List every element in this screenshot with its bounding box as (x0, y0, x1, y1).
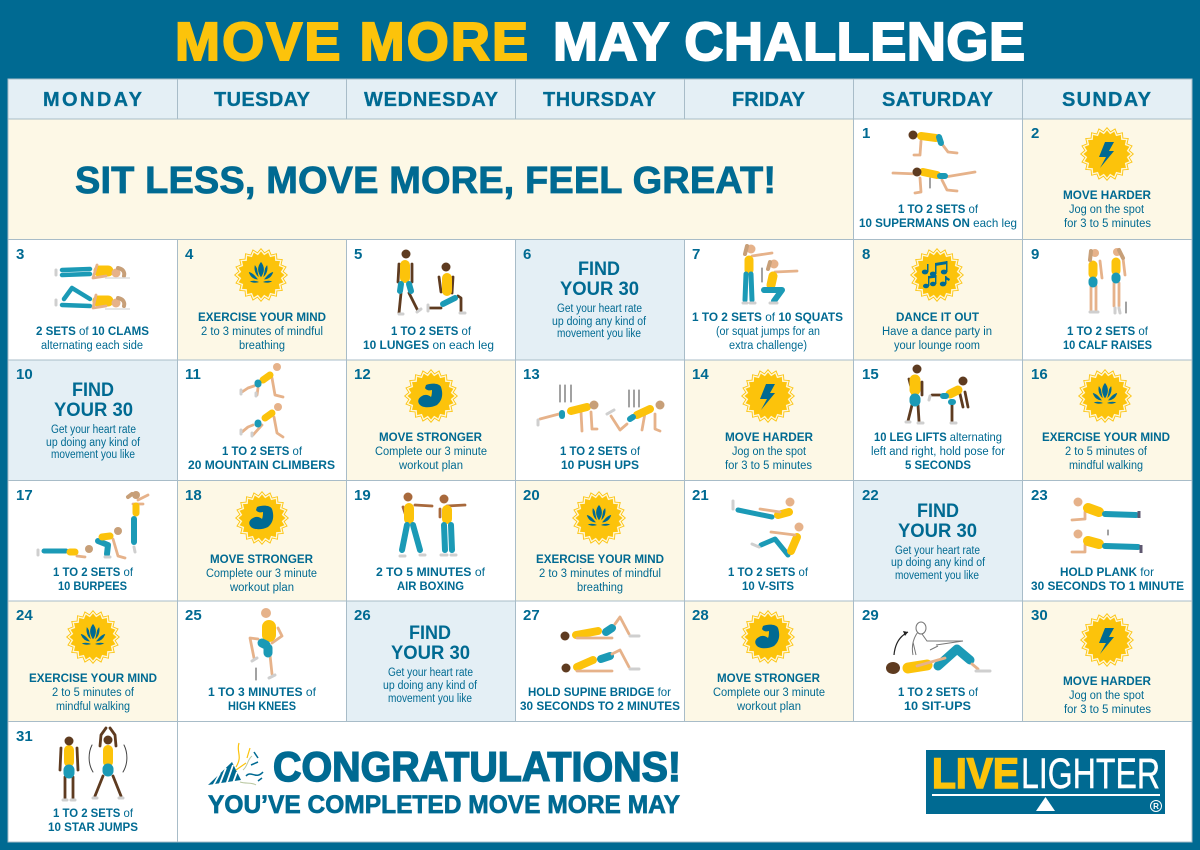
figure: star jumps (60, 728, 127, 800)
caption: movement you like (388, 693, 472, 705)
day number: 15 (862, 366, 879, 383)
caption: 10 SUPERMANS ON each leg (859, 216, 1017, 230)
icon: lotus badge (1078, 369, 1132, 423)
caption: 1 TO 2 SETS of (898, 202, 979, 216)
day number: 10 (16, 366, 33, 383)
caption: 2 to 3 minutes of mindful (539, 568, 661, 580)
figure: squats (743, 244, 797, 303)
caption (36, 324, 149, 352)
caption: up doing any kind of (891, 557, 986, 569)
caption: 1 TO 2 SETS of (1067, 324, 1149, 338)
caption: breathing (577, 582, 623, 594)
caption: EXERCISE YOUR MIND (1042, 430, 1170, 444)
caption: HOLD SUPINE BRIDGE for (528, 685, 671, 699)
figure: high knees (250, 608, 282, 680)
day number: 20 (523, 487, 540, 504)
figure: burpees (38, 491, 148, 558)
caption: YOUR 30 (560, 279, 639, 300)
caption (48, 806, 138, 834)
caption: MOVE STRONGER (210, 552, 313, 566)
caption: FIND (578, 259, 620, 280)
logo: LiveLighter (926, 750, 1165, 814)
day number: 22 (862, 487, 879, 504)
day number: 3 (16, 246, 24, 263)
caption: Complete our 3 minute (713, 687, 825, 699)
caption (188, 444, 335, 472)
caption: 1 TO 2 SETS of (391, 324, 472, 338)
figure: lunges (398, 250, 465, 314)
caption (376, 565, 486, 593)
caption: YOUR 30 (898, 521, 977, 542)
panel: day 9 (1022, 240, 1192, 360)
icon: lightning badge (1080, 613, 1134, 667)
panel: day 22 (854, 480, 1022, 601)
caption (692, 310, 843, 352)
day number: 26 (354, 607, 371, 624)
caption: FIND (409, 623, 451, 644)
caption: 2 to 5 minutes of (1065, 446, 1148, 458)
caption (552, 259, 647, 340)
panel: day 17 (8, 480, 178, 601)
caption: 5 SECONDS (905, 458, 971, 472)
day number: 6 (523, 246, 531, 263)
heading: CONGRATULATIONS! (273, 743, 681, 790)
caption (713, 671, 825, 713)
caption (871, 430, 1005, 472)
caption: 1 TO 2 SETS of (898, 685, 979, 699)
caption: breathing (239, 340, 285, 352)
caption: 1 TO 2 SETS of 10 SQUATS (692, 310, 843, 324)
figure: clams (56, 265, 130, 309)
panel: day 13 (516, 360, 684, 480)
caption: mindful walking (1069, 460, 1143, 472)
weekday header row: SUNDAY (1062, 89, 1152, 111)
title (175, 12, 1025, 72)
caption: 10 BURPEES (58, 579, 127, 593)
panel: day 25 (178, 601, 346, 722)
panel: day 15 (854, 360, 1022, 480)
caption: Jog on the spot (732, 446, 807, 458)
panel: day 26 (346, 601, 516, 722)
caption: 30 SECONDS TO 1 MINUTE (1031, 579, 1184, 593)
weekday header row: TUESDAY (214, 89, 311, 111)
panel: day 27 (516, 601, 684, 722)
figure: supermans (893, 130, 975, 193)
day number: 11 (185, 366, 201, 383)
caption: workout plan (229, 582, 294, 594)
panel: day 31 (8, 722, 178, 842)
caption (1063, 674, 1151, 716)
caption: AIR BOXING (397, 579, 464, 593)
title: MOVE MORE (175, 12, 528, 72)
panel: day 4 (178, 240, 346, 360)
day number: 16 (1031, 366, 1048, 383)
panel: day 23 (1022, 480, 1192, 601)
panel: day 7 (684, 240, 854, 360)
caption: for 3 to 5 minutes (1064, 218, 1151, 230)
day number: 12 (354, 366, 371, 383)
weekday header row: SATURDAY (882, 89, 994, 111)
logo: LiveLighter: R (1153, 802, 1159, 811)
panel: day 16 (1022, 360, 1192, 480)
caption: MOVE HARDER (1063, 188, 1151, 202)
icon: party popper (208, 743, 263, 786)
panel: day 1 (854, 119, 1022, 240)
caption: 10 SIT-UPS (904, 699, 971, 713)
caption (536, 552, 664, 594)
caption: 1 TO 2 SETS of (222, 444, 303, 458)
caption (1063, 188, 1151, 230)
caption: EXERCISE YOUR MIND (536, 552, 664, 566)
icon: music notes badge (910, 248, 964, 302)
caption: HIGH KNEES (228, 699, 296, 713)
logo: LiveLighter: LIVE (932, 750, 1019, 798)
caption: 1 TO 3 MINUTES of (208, 685, 317, 699)
caption (208, 685, 317, 713)
caption: 1 TO 2 SETS of (53, 806, 134, 820)
caption (29, 671, 157, 713)
icon: lotus badge (66, 610, 120, 664)
caption: 10 LEG LIFTS alternating (874, 430, 1002, 444)
day number: 8 (862, 246, 870, 263)
caption: HOLD PLANK for (1060, 565, 1154, 579)
panel: day 11 (178, 360, 346, 480)
day number: 14 (692, 366, 709, 383)
caption: EXERCISE YOUR MIND (29, 671, 157, 685)
caption (1063, 324, 1152, 352)
panel: day 12 (346, 360, 516, 480)
caption (728, 565, 809, 593)
day number: 4 (185, 246, 194, 263)
caption: workout plan (398, 460, 463, 472)
day number: 7 (692, 246, 700, 263)
caption (1042, 430, 1170, 472)
caption: Jog on the spot (1069, 204, 1145, 216)
caption (206, 552, 317, 594)
caption: Get your heart rate (895, 545, 980, 557)
icon: flexed arm badge (404, 369, 458, 423)
caption: EXERCISE YOUR MIND (198, 310, 326, 324)
caption: 10 V-SITS (742, 579, 794, 593)
caption: 30 SECONDS TO 2 MINUTES (520, 699, 680, 713)
day number: 18 (185, 487, 202, 504)
day number: 21 (692, 487, 709, 504)
caption: movement you like (895, 570, 979, 582)
panel: day 21 (684, 480, 854, 601)
day number: 1 (862, 125, 870, 142)
day number: 2 (1031, 125, 1039, 142)
day number: 28 (692, 607, 709, 624)
panel: day 24 (8, 601, 178, 722)
caption: Complete our 3 minute (375, 446, 487, 458)
weekday header row: THURSDAY (543, 89, 657, 111)
caption (859, 202, 1017, 230)
figure: supine bridge (560, 617, 639, 672)
panel: day 30 (1022, 601, 1192, 722)
caption: Have a dance party in (882, 326, 992, 338)
caption (560, 444, 641, 472)
icon: flexed arm badge (235, 491, 289, 545)
caption: 2 TO 5 MINUTES of (376, 565, 486, 579)
caption: 1 TO 2 SETS of (728, 565, 809, 579)
caption (1031, 565, 1184, 593)
caption: movement you like (51, 449, 135, 461)
caption: Complete our 3 minute (206, 568, 317, 580)
caption: 10 CALF RAISES (1063, 338, 1152, 352)
caption: DANCE IT OUT (896, 310, 980, 324)
caption: MOVE STRONGER (717, 671, 820, 685)
panel: day 3 (8, 240, 178, 360)
caption: up doing any kind of (46, 437, 141, 449)
panel: day 10 (8, 360, 178, 480)
caption: YOUR 30 (391, 643, 470, 664)
panel: slogan banner: SIT LESS, MOVE MORE, FEEL GREAT! (75, 160, 776, 202)
caption (520, 685, 680, 713)
weekday header row: FRIDAY (732, 89, 806, 111)
weekday header row (8, 79, 1192, 119)
icon: flexed arm badge (741, 610, 795, 664)
figure: leg lifts (906, 364, 968, 423)
caption: 2 SETS of 10 CLAMS (36, 324, 149, 338)
caption: alternating each side (41, 340, 143, 352)
day number: 13 (523, 366, 540, 383)
caption (725, 430, 813, 472)
caption (375, 430, 487, 472)
caption: (or squat jumps for an (716, 326, 820, 338)
panel: day 18 (178, 480, 346, 601)
panel: day 8 (854, 240, 1022, 360)
panel: congratulations (178, 722, 1192, 842)
caption (882, 310, 992, 352)
figure: calf raises (1090, 248, 1126, 313)
caption: up doing any kind of (552, 316, 647, 328)
day number: 30 (1031, 607, 1048, 624)
caption: Get your heart rate (51, 424, 136, 436)
caption: movement you like (557, 328, 641, 340)
panel: day 19 (346, 480, 516, 601)
caption: your lounge room (894, 340, 980, 352)
caption: left and right, hold pose for (871, 446, 1005, 458)
day number: 31 (16, 728, 33, 745)
day number: 29 (862, 607, 879, 624)
icon: lightning badge (741, 369, 795, 423)
day number: 17 (16, 487, 33, 504)
caption: 2 to 5 minutes of (52, 687, 135, 699)
panel: day 20 (516, 480, 684, 601)
caption: Get your heart rate (557, 303, 642, 315)
caption: extra challenge) (729, 340, 807, 352)
caption: Jog on the spot (1069, 690, 1145, 702)
figure: air boxing (400, 492, 465, 556)
caption: 20 MOUNTAIN CLIMBERS (188, 458, 335, 472)
caption: MOVE STRONGER (379, 430, 482, 444)
caption: FIND (72, 380, 114, 401)
panel: day 2 (1022, 119, 1192, 240)
caption: mindful walking (56, 701, 130, 713)
weekday header row: MONDAY (43, 89, 143, 111)
caption: for 3 to 5 minutes (725, 460, 812, 472)
icon: lotus badge (572, 491, 626, 545)
figure: push ups (538, 385, 664, 431)
panel: day 14 (684, 360, 854, 480)
caption (383, 623, 478, 705)
caption (891, 501, 986, 582)
icon: lightning badge (1080, 127, 1134, 181)
panel: day 29 (854, 601, 1022, 722)
figure: v-sits (733, 498, 804, 555)
day number: 5 (354, 246, 362, 263)
day number: 27 (523, 607, 540, 624)
caption (198, 310, 326, 352)
caption: up doing any kind of (383, 680, 478, 692)
caption: for 3 to 5 minutes (1064, 704, 1151, 716)
caption: YOUR 30 (54, 400, 133, 421)
caption: 10 PUSH UPS (561, 458, 639, 472)
caption: 1 TO 2 SETS of (53, 565, 134, 579)
caption: 10 STAR JUMPS (48, 820, 138, 834)
caption: FIND (917, 501, 959, 522)
title: MAY CHALLENGE (553, 12, 1025, 72)
panel: day 28 (684, 601, 854, 722)
caption (53, 565, 134, 593)
icon: lotus badge (234, 248, 288, 302)
weekday header row: WEDNESDAY (364, 89, 499, 111)
day number: 9 (1031, 246, 1039, 263)
figure: sit-ups (886, 622, 990, 674)
caption (363, 324, 494, 352)
panel: slogan banner (8, 119, 854, 240)
caption: Get your heart rate (388, 667, 473, 679)
caption: 1 TO 2 SETS of (560, 444, 641, 458)
caption (898, 685, 979, 713)
caption: MOVE HARDER (1063, 674, 1151, 688)
panel: day 5 (346, 240, 516, 360)
panel: day 6 (516, 240, 684, 360)
caption: workout plan (736, 701, 801, 713)
figure: mountain climbers (241, 363, 283, 437)
figure: plank (1072, 498, 1141, 553)
day number: 23 (1031, 487, 1048, 504)
caption: 2 to 3 minutes of mindful (201, 326, 323, 338)
subheading: YOU’VE COMPLETED MOVE MORE MAY (208, 791, 680, 819)
day number: 24 (16, 607, 33, 624)
caption (46, 380, 141, 461)
day number: 19 (354, 487, 371, 504)
day number: 25 (185, 607, 202, 624)
caption: 10 LUNGES on each leg (363, 338, 494, 352)
caption: MOVE HARDER (725, 430, 813, 444)
